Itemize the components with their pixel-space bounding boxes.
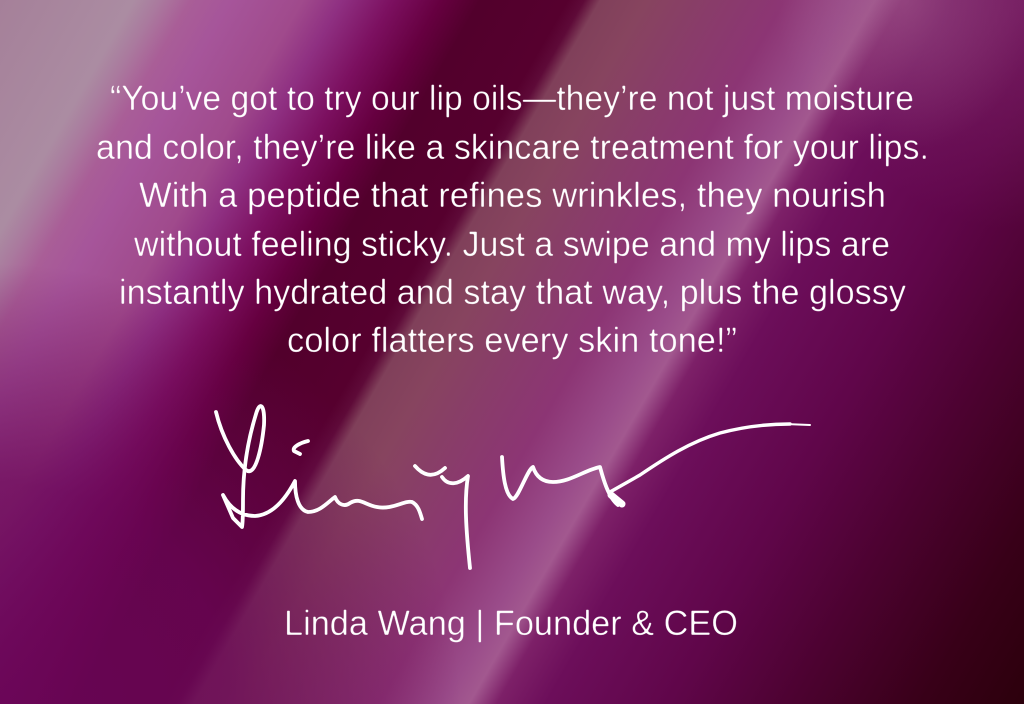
quote text: instantly hydrated and stay that way, plus the glossy (119, 273, 906, 312)
quote text: color flatters every skin tone!” (287, 321, 737, 360)
attribution: Linda Wang | Founder & CEO (284, 604, 738, 643)
quote text (96, 79, 929, 360)
quote text: “You’ve got to try our lip oils—they’re not just moisture (110, 79, 914, 118)
quote text: without feeling sticky. Just a swipe and my lips are (133, 225, 890, 264)
signature (216, 406, 810, 568)
quote text: With a peptide that refines wrinkles, they nourish (139, 176, 886, 215)
quote text: and color, they’re like a skincare treatment for your lips. (96, 128, 929, 167)
